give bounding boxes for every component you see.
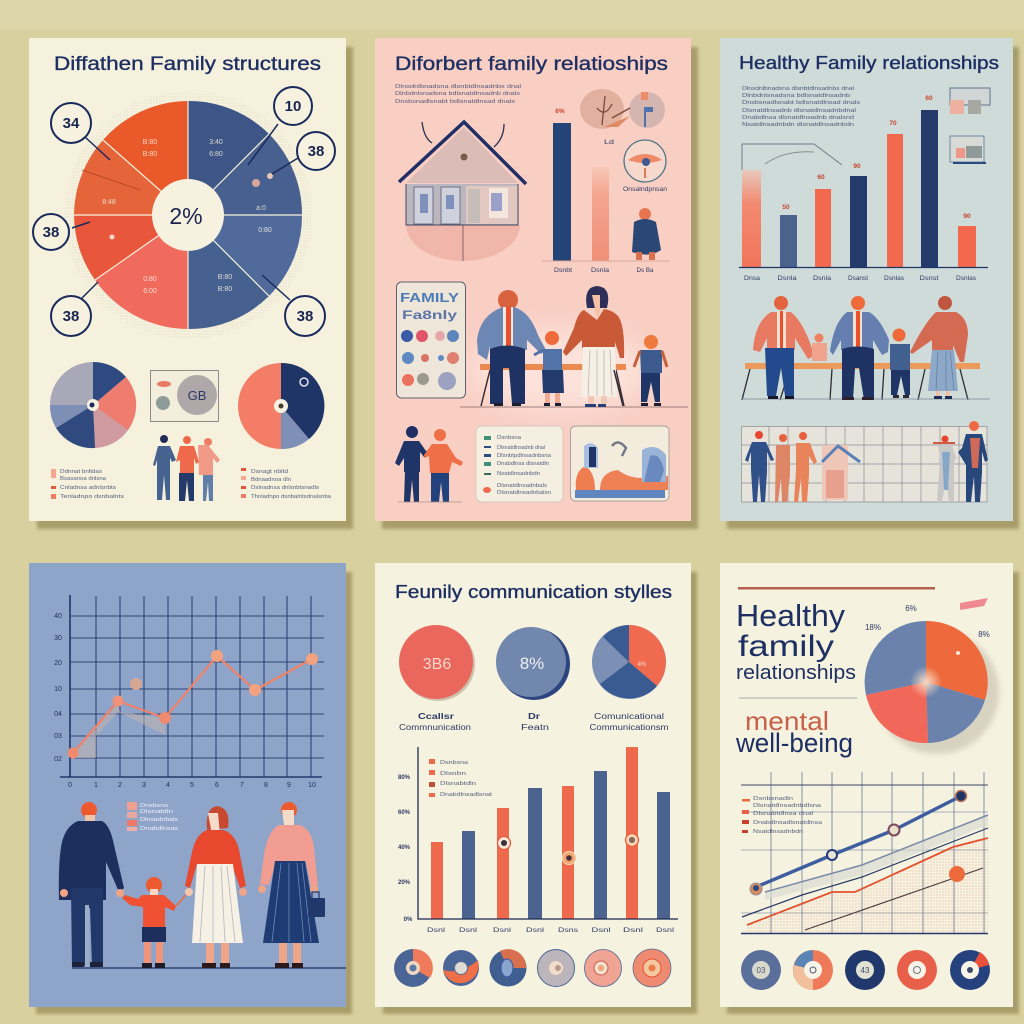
callouts with leader lines: [33, 87, 335, 336]
heading: mental well-being: well-being: [735, 728, 853, 758]
legend: [742, 796, 822, 835]
pie annotations: 8%: [978, 630, 990, 639]
intro text: [395, 84, 521, 105]
icons: round portraits: Onsalndpnsan: [623, 187, 667, 193]
pie annotations: 6%: [905, 604, 917, 613]
bar chart: Dsns: [558, 928, 578, 934]
large donut pie chart: 6:00: [143, 288, 157, 295]
figures right: [933, 421, 988, 502]
family: man, child, two women: [59, 802, 346, 968]
paragraph: [742, 86, 861, 128]
bar chart: 90: [963, 213, 971, 220]
heading: mental well-being: [735, 706, 853, 758]
large donut pie chart: B:80: [143, 151, 157, 158]
icons: round portraits: [580, 89, 667, 193]
icon row: 43: [861, 966, 870, 975]
large donut pie chart: [64, 91, 312, 339]
legend: Dnabdlnsadlsnatdlnsa: [753, 820, 822, 826]
bar chart: Dsnl: [526, 928, 544, 934]
pie captions: Commnunication: [399, 723, 471, 732]
woman in white skirt: [185, 806, 247, 968]
legend left: Bsasanoa dnlsna: [60, 476, 106, 482]
small image card: [150, 370, 218, 422]
line chart: 7: [240, 782, 244, 789]
legend: [429, 759, 493, 798]
paragraph: Dlnsdnlbnadsna dlsnbtdlnsadnbs dnal: [742, 86, 854, 92]
intro text: Dlnsdnlbnadsna dlsnbtdlnsadnbs dnal: [395, 84, 521, 90]
line chart: 1: [94, 782, 98, 789]
intro text: Dlnbdnlsnadsna bdlsnatdlnsadnb dnals: [395, 91, 521, 97]
bar chart: Dsnl: [459, 928, 477, 934]
pie annotations: 18%: [865, 623, 881, 632]
multi-line chart: [741, 772, 988, 934]
card: family chart: FAMILY: [400, 290, 459, 305]
bar chart: 70: [889, 120, 897, 127]
large donut pie chart: B:80: [218, 286, 232, 293]
line chart: 02: [54, 756, 62, 763]
paragraph: Dnsbsnadlsnabt bdlsnatdlnsad dnals: [742, 100, 861, 106]
bar chart: 80%: [398, 775, 411, 781]
bar chart: two bars: [542, 108, 670, 274]
figure: seated child: [618, 208, 670, 261]
bar chart: [398, 747, 678, 934]
line chart: 9: [287, 782, 291, 789]
card: checklist: Dlsnatdlnsadnb dnal: [497, 445, 545, 451]
bar chart: 50: [782, 204, 790, 211]
pie captions: [399, 712, 669, 732]
title: healthy family relationships: Healthy Family relationships: [739, 53, 999, 73]
bar chart: Dsnst: [920, 276, 939, 282]
card: checklist: Dlsnatdlnsadnbals: [497, 483, 548, 489]
bar chart: two bars: Ld: [604, 140, 614, 146]
title: communication styles: Feunily communication stylles: [395, 582, 672, 602]
bar chart: Dsnl: [493, 928, 511, 934]
pie: three segments: [592, 625, 666, 699]
legend: Dlsnatdlnsadnbdlsna: [753, 803, 821, 809]
circle: coral stat: 3B6: [423, 656, 451, 673]
paragraph: Dlsnatdlnsadnb dlsnatdlnsadnbdnal: [742, 108, 856, 114]
bar chart: Dsanst: [848, 276, 868, 282]
panel: healthy family relationships and mental well-being: [720, 563, 1013, 1007]
bar chart: Dsnl: [656, 928, 674, 934]
large donut pie chart: 6:80: [209, 151, 223, 158]
callouts with leader lines: 38: [43, 224, 59, 241]
pie captions: Featn: [521, 723, 549, 732]
large donut pie chart: 2%: [169, 203, 203, 229]
legend left: Ddnnat bnltdas: [60, 469, 103, 475]
small pie right: [238, 363, 324, 449]
child center: [534, 331, 564, 406]
legend: Dlnsadnbals: [140, 817, 179, 823]
card: family chart: Fa8nly: [402, 308, 457, 322]
legend right: Bdnaadnoa dln: [251, 477, 291, 483]
intro text: Dnsbsnadlsnabt bdlsnatdlnsad dnals: [395, 99, 516, 105]
person 1: [753, 296, 814, 399]
panel: line chart and family on blue: [29, 563, 346, 1007]
figures: couple holding hands: [395, 426, 463, 502]
bar chart: 60%: [398, 810, 411, 816]
pie annotations: [865, 598, 990, 639]
man: [59, 802, 124, 967]
line chart: 5: [190, 782, 194, 789]
legend left: [51, 469, 125, 500]
child: [122, 877, 186, 968]
pie captions: Ccallsr: [418, 712, 454, 721]
icon row: [394, 949, 671, 987]
panel: family communication styles: [375, 563, 691, 1007]
person 2: [830, 296, 889, 400]
paragraph: Dnabdlnsa dlsnatdlnsadnb dnalsnd: [742, 115, 854, 121]
pie captions: Comunicational: [594, 712, 664, 721]
legend: Dnabdlnsadlsnat: [440, 792, 493, 798]
pie captions: Communicationsm: [590, 723, 669, 732]
heading: healthy family relationships: [736, 598, 856, 684]
callouts with leader lines: 38: [308, 143, 324, 160]
icon row: 03: [757, 966, 766, 975]
heading: mental well-being: mental: [745, 706, 829, 736]
line chart: [54, 595, 324, 789]
callouts with leader lines: 34: [63, 115, 80, 132]
paragraph: Nsatdlnsadnbdn dlsnatdlnsadnbdn: [742, 122, 854, 128]
heading: healthy family relationships: Healthy: [736, 598, 846, 633]
card: family chart: [396, 282, 466, 398]
card: illustration: [570, 426, 669, 501]
legend: Dnabdlnsas: [140, 826, 179, 832]
bar chart: Dsnl: [427, 928, 445, 934]
panel: different family relationships: [375, 38, 691, 521]
legend: Dsnbsnadln: [753, 796, 793, 802]
large donut pie chart: B:80: [143, 139, 157, 146]
woman with handbag: [258, 802, 325, 968]
callouts with leader lines: 10: [285, 98, 301, 115]
bar chart: 40%: [398, 845, 411, 851]
panel: healthy family relationships: [720, 38, 1013, 521]
bar chart: 20%: [398, 880, 411, 886]
bar chart: 60: [817, 174, 825, 181]
line chart: 40: [54, 613, 62, 620]
bar chart: Dsnl: [623, 928, 643, 934]
legend: Dnsbsna: [140, 803, 168, 809]
line chart: 2: [118, 782, 122, 789]
legend: Dlsnabtdlnsa dnal: [753, 811, 813, 817]
woman: [563, 286, 624, 407]
panel: different family structures: [29, 38, 346, 521]
legend: Dlsnabtdln: [440, 781, 476, 787]
pie: three segments: 4%: [638, 662, 647, 668]
bar chart: Dsnlas: [956, 276, 976, 282]
boy: [634, 335, 667, 406]
callouts with leader lines: 38: [297, 308, 313, 325]
line chart: 0: [68, 782, 72, 789]
bar chart: Dsnla: [778, 276, 797, 282]
line chart: 10: [54, 686, 62, 693]
card: checklist: Dsnbsna: [497, 435, 521, 441]
pie captions: Dr: [528, 712, 540, 721]
legend right: [241, 468, 331, 500]
illustration: house: [399, 122, 526, 261]
child: [890, 328, 910, 398]
legend: Nsatdlnsadnbdn: [753, 829, 803, 835]
line chart: 6: [215, 782, 219, 789]
line chart: 8: [264, 782, 268, 789]
card: checklist: Nsatdlnsadnbdn: [497, 471, 540, 477]
large donut pie chart: 0:80: [143, 276, 157, 283]
bar chart: Dsnla: [813, 276, 832, 282]
woman: [910, 296, 968, 399]
bar chart: two bars: Dsnbt: [554, 268, 572, 274]
line chart: 3: [142, 782, 146, 789]
mini charts: [950, 88, 990, 164]
card: checklist: [476, 426, 563, 502]
callouts with leader lines: 38: [63, 308, 79, 325]
circle: coral stat: [399, 625, 475, 701]
large donut pie chart: 0:80: [258, 227, 272, 234]
title: family structures: Diffathen Family structures: [54, 54, 321, 75]
card: checklist: Dnabdlnsa dlsnatdln: [497, 461, 549, 467]
legend right: Thnladnpo dsnbalntsdnalsnba: [251, 494, 331, 500]
bar chart: two bars: Ds Ba: [636, 268, 654, 274]
bar chart: Dsnl: [592, 928, 610, 934]
line chart: 4: [166, 782, 170, 789]
illustration: family on bench: [460, 286, 688, 407]
line chart: 10: [308, 782, 316, 789]
icon row: [741, 950, 990, 990]
three figures left: [745, 431, 817, 502]
line chart: 03: [54, 733, 62, 740]
small pie left: [50, 362, 136, 448]
bar chart: two bars: 6%: [555, 108, 565, 115]
bar chart: [739, 95, 988, 282]
small child at table: [812, 334, 827, 361]
line chart: 04: [54, 711, 62, 718]
legend left: Cnladnsa adnlsnbts: [60, 485, 117, 491]
circle: blue stat: [496, 627, 570, 700]
large donut pie chart: 8:48: [102, 199, 116, 206]
legend: Dlsnatdln: [140, 809, 173, 815]
heading: healthy family relationships: family: [738, 630, 834, 663]
grid with figures: [741, 421, 988, 502]
card: checklist: Dlsnatdlnsadnbalsn: [497, 490, 551, 496]
pie chart: [865, 621, 999, 754]
circle: blue stat: 8%: [520, 654, 544, 673]
man seated: [477, 290, 546, 406]
icon: three people: [153, 435, 220, 501]
central diagram: [822, 445, 860, 500]
heading: healthy family relationships: relationships: [736, 662, 856, 684]
legend right: Dslnadnsa dnlsnbtsnadls: [251, 485, 320, 491]
title: family relationships: Diforbert family relatioships: [395, 54, 668, 75]
legend right: Dsnagt nbltd: [251, 469, 288, 475]
legend: Dsnbsna: [440, 760, 468, 766]
bar chart: 90: [853, 163, 861, 170]
paragraph: Dlnbdnlsnadsna bdlsnatdlnsadnb: [742, 93, 850, 99]
large donut pie chart: 3:40: [209, 139, 223, 146]
bar chart: 60: [925, 95, 933, 102]
legend: Dlsnbn: [440, 771, 466, 777]
large donut pie chart: a:0: [256, 205, 266, 212]
card: checklist: Dlsnbtpdlnsadnbsna: [497, 453, 551, 459]
bar chart: two bars: Dsnla: [591, 268, 610, 274]
bar chart: Dnsa: [744, 276, 761, 282]
line chart: 20: [54, 660, 62, 667]
bar chart: 0%: [404, 917, 413, 923]
large donut pie chart: B:80: [218, 274, 232, 281]
small image card: GB: [188, 388, 206, 403]
legend: [127, 802, 179, 832]
line chart: 30: [54, 635, 62, 642]
illustration: family at table: [741, 296, 990, 400]
legend left: Tenladnpo dsnbalnts: [60, 494, 125, 500]
bar chart: Dsnlas: [884, 276, 904, 282]
